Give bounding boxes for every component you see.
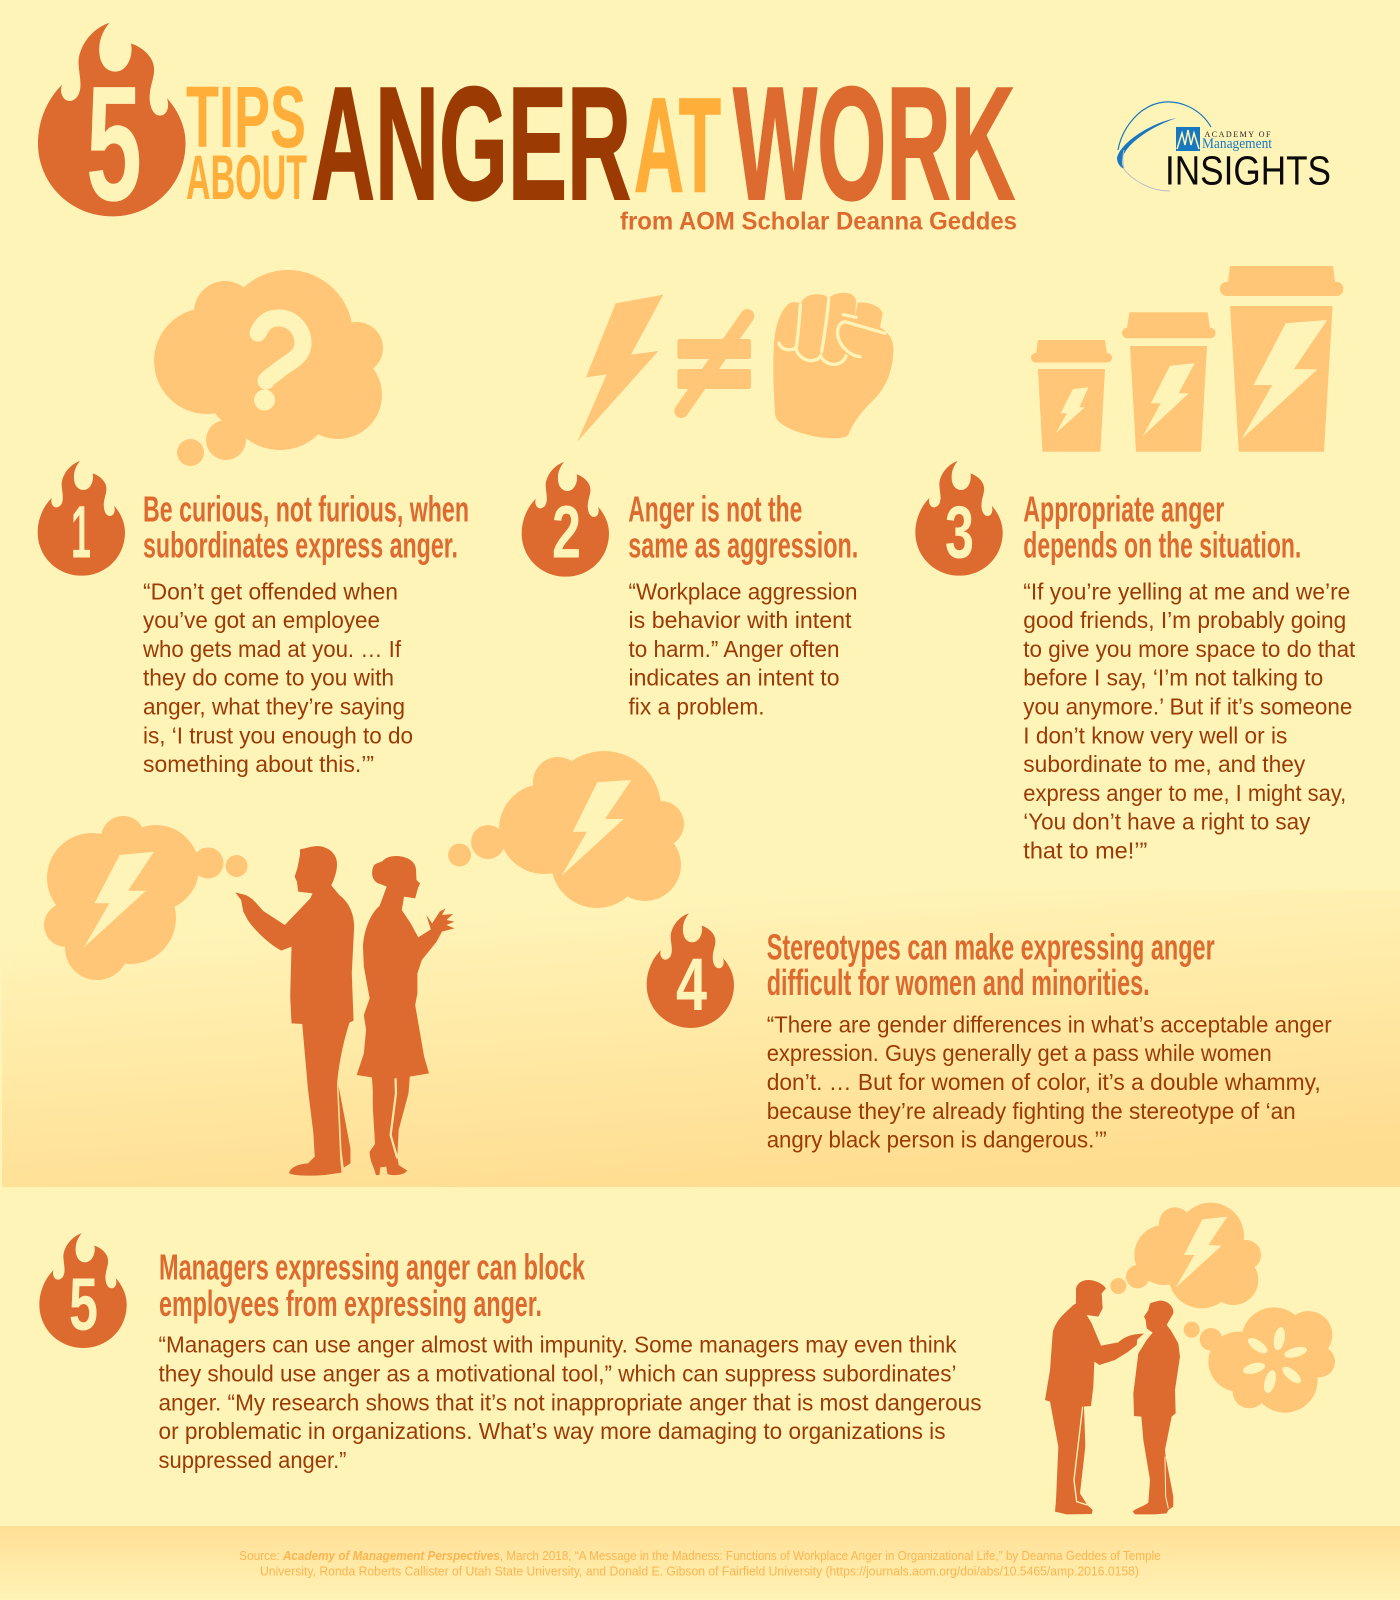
tip 2 body text: is behavior with intent <box>628 607 852 633</box>
icon: flame number 1: 1 <box>71 491 91 574</box>
thought cloud right <box>448 751 684 908</box>
silhouette: woman gesturing <box>357 856 454 1175</box>
tip 4 body text: because they’re already fighting the stereotype of ‘an <box>767 1098 1296 1124</box>
tip 1 body text: is, ‘I trust you enough to do <box>143 722 413 748</box>
tip 5 body text: suppressed anger.” <box>158 1447 346 1473</box>
tip 1 body text: who gets mad at you. … If <box>142 636 402 662</box>
tip 1 body text: you’ve got an employee <box>143 607 380 633</box>
heading word: TIPS: TIPS <box>186 69 306 166</box>
small cup <box>1031 340 1112 452</box>
thought cloud left <box>44 816 248 980</box>
silhouette: man pointing <box>235 846 354 1176</box>
tip 2 heading: Anger is not the <box>628 489 802 530</box>
tip 4 heading: difficult for women and minorities. <box>767 962 1150 1003</box>
tip 3 body text: that to me!’” <box>1023 838 1147 864</box>
tip 1 <box>38 461 469 777</box>
tip 2 <box>522 462 858 720</box>
tip 3 heading <box>1023 489 1301 566</box>
tip 1 heading: Be curious, not furious, when <box>143 489 469 530</box>
tip 5 body text: anger. “My research shows that it’s not inappropriate anger that is most dangerous <box>158 1389 982 1415</box>
illustration: man and woman back to back with thought clouds <box>44 751 684 1176</box>
icon: large flame with number 5 <box>38 23 186 235</box>
tip 4 body text: don’t. … But for women of color, it’s a double whammy, <box>767 1069 1321 1095</box>
thought cloud: lightning <box>1110 1203 1261 1308</box>
tip 1 heading <box>143 489 469 566</box>
icon: flame number 1 <box>38 461 125 576</box>
large cup <box>1220 266 1343 452</box>
icon: flame number 2 <box>522 462 609 577</box>
tip 3 body text <box>1023 578 1356 864</box>
title <box>38 23 1017 235</box>
silhouette: manager <box>1045 1280 1144 1514</box>
source footer <box>239 1549 1161 1578</box>
tip 3 body text: before I say, ‘I’m not talking to <box>1023 665 1323 691</box>
tip 2 heading: same as aggression. <box>628 524 858 566</box>
medium cup <box>1122 312 1216 452</box>
tip 4 body text: expression. Guys generally get a pass while women <box>767 1040 1272 1066</box>
icon: thought cloud with question mark <box>154 270 383 466</box>
icon: flame number 3 <box>915 461 1003 576</box>
tip 5 body text: or problematic in organizations. What’s way more damaging to organizations is <box>158 1418 946 1444</box>
tip 2 body text: “Workplace aggression <box>628 578 858 604</box>
source footer: University, Ronda Roberts Callister of Utah State University, and Donald E. Gibson of Fairfield University (https://journals.aom.org/doi/abs/10.5465/amp.2016.0158) <box>260 1564 1139 1578</box>
tip 3 body text: you anymore.’ But if it’s someone <box>1023 694 1352 720</box>
tip 1 body text: “Don’t get offended when <box>143 578 398 604</box>
tip 4 <box>647 913 1332 1153</box>
tip 3 body text: “If you’re yelling at me and we’re <box>1023 578 1350 604</box>
tip 3 body text: I don’t know very well or is <box>1023 722 1287 748</box>
source footer: Source: Academy of Management Perspectives, March 2018, “A Message in the Madness: Functions of Workplace Anger in Organizational Life,” by Deanna Geddes of Temple <box>239 1549 1161 1563</box>
thought cloud: flower <box>1184 1307 1335 1413</box>
tip 1 body text: something about this.’” <box>143 751 374 777</box>
tip 4 heading <box>767 926 1215 1003</box>
tip 2 body text <box>628 578 858 720</box>
tip 4 body text: “There are gender differences in what’s acceptable anger <box>767 1011 1332 1037</box>
icon: flame number 4 <box>647 913 734 1028</box>
tip 5 heading: employees from expressing anger. <box>159 1283 542 1324</box>
icon: flame number 5 <box>39 1233 127 1348</box>
tip 3 <box>915 461 1356 864</box>
tip 5 body text: “Managers can use anger almost with impunity. Some managers may even think <box>158 1332 957 1358</box>
tip 5 <box>39 1233 982 1473</box>
icon: three coffee cups with lightning <box>1031 266 1343 452</box>
tip 4 body text: angry black person is dangerous.’” <box>767 1127 1107 1153</box>
tip 5 heading: Managers expressing anger can block <box>159 1246 586 1287</box>
logo: Academy of Management Insights <box>1117 102 1331 193</box>
icon: large flame with number 5: 5 <box>86 52 142 235</box>
subtitle: from AOM Scholar Deanna Geddes <box>620 208 1017 236</box>
silhouette: employee <box>1133 1301 1180 1514</box>
tip 3 body text: express anger to me, I might say, <box>1023 780 1346 806</box>
tip 2 heading <box>628 489 858 566</box>
tip 2 body text: fix a problem. <box>628 694 764 720</box>
tip 5 heading <box>159 1246 586 1324</box>
icon: flame number 2: 2 <box>552 491 581 574</box>
heading word: WORK: WORK <box>733 54 1015 234</box>
tip 3 body text: subordinate to me, and they <box>1023 751 1306 777</box>
icon: flame number 4: 4 <box>676 943 707 1026</box>
logo: Academy of Management Insights: ACADEMY OF <box>1204 130 1271 139</box>
tip 2 body text: indicates an intent to <box>628 665 840 691</box>
illustration: manager pointing at employee with thought clouds <box>1045 1203 1335 1514</box>
tip 5 body text: they should use anger as a motivational tool,” which can suppress subordinates’ <box>158 1360 956 1386</box>
icon: flame number 3: 3 <box>945 491 974 574</box>
icon: flame number 5: 5 <box>69 1263 98 1346</box>
tip 3 heading: Appropriate anger <box>1023 489 1224 530</box>
tip 1 body text: they do come to you with <box>143 665 394 691</box>
tip 1 heading: subordinates express anger. <box>143 524 458 566</box>
logo: Academy of Management Insights: INSIGHTS <box>1165 147 1331 193</box>
tip 3 body text: good friends, I’m probably going <box>1023 607 1346 633</box>
tip 3 body text: ‘You don’t have a right to say <box>1023 809 1311 835</box>
tip 3 body text: to give you more space to do that <box>1023 636 1356 662</box>
tip 1 body text <box>142 578 413 777</box>
tip 5 body text <box>158 1332 982 1473</box>
heading word: AT: AT <box>634 70 721 220</box>
tip 2 body text: to harm.” Anger often <box>628 636 840 662</box>
logo: Academy of Management Insights: Management <box>1202 136 1273 152</box>
heading word: ABOUT: ABOUT <box>186 143 307 213</box>
heading word: ANGER: ANGER <box>311 54 631 234</box>
icon: lightning not equal to fist <box>577 293 893 442</box>
tip 1 body text: anger, what they’re saying <box>143 694 405 720</box>
tip 4 body text <box>767 1011 1332 1153</box>
